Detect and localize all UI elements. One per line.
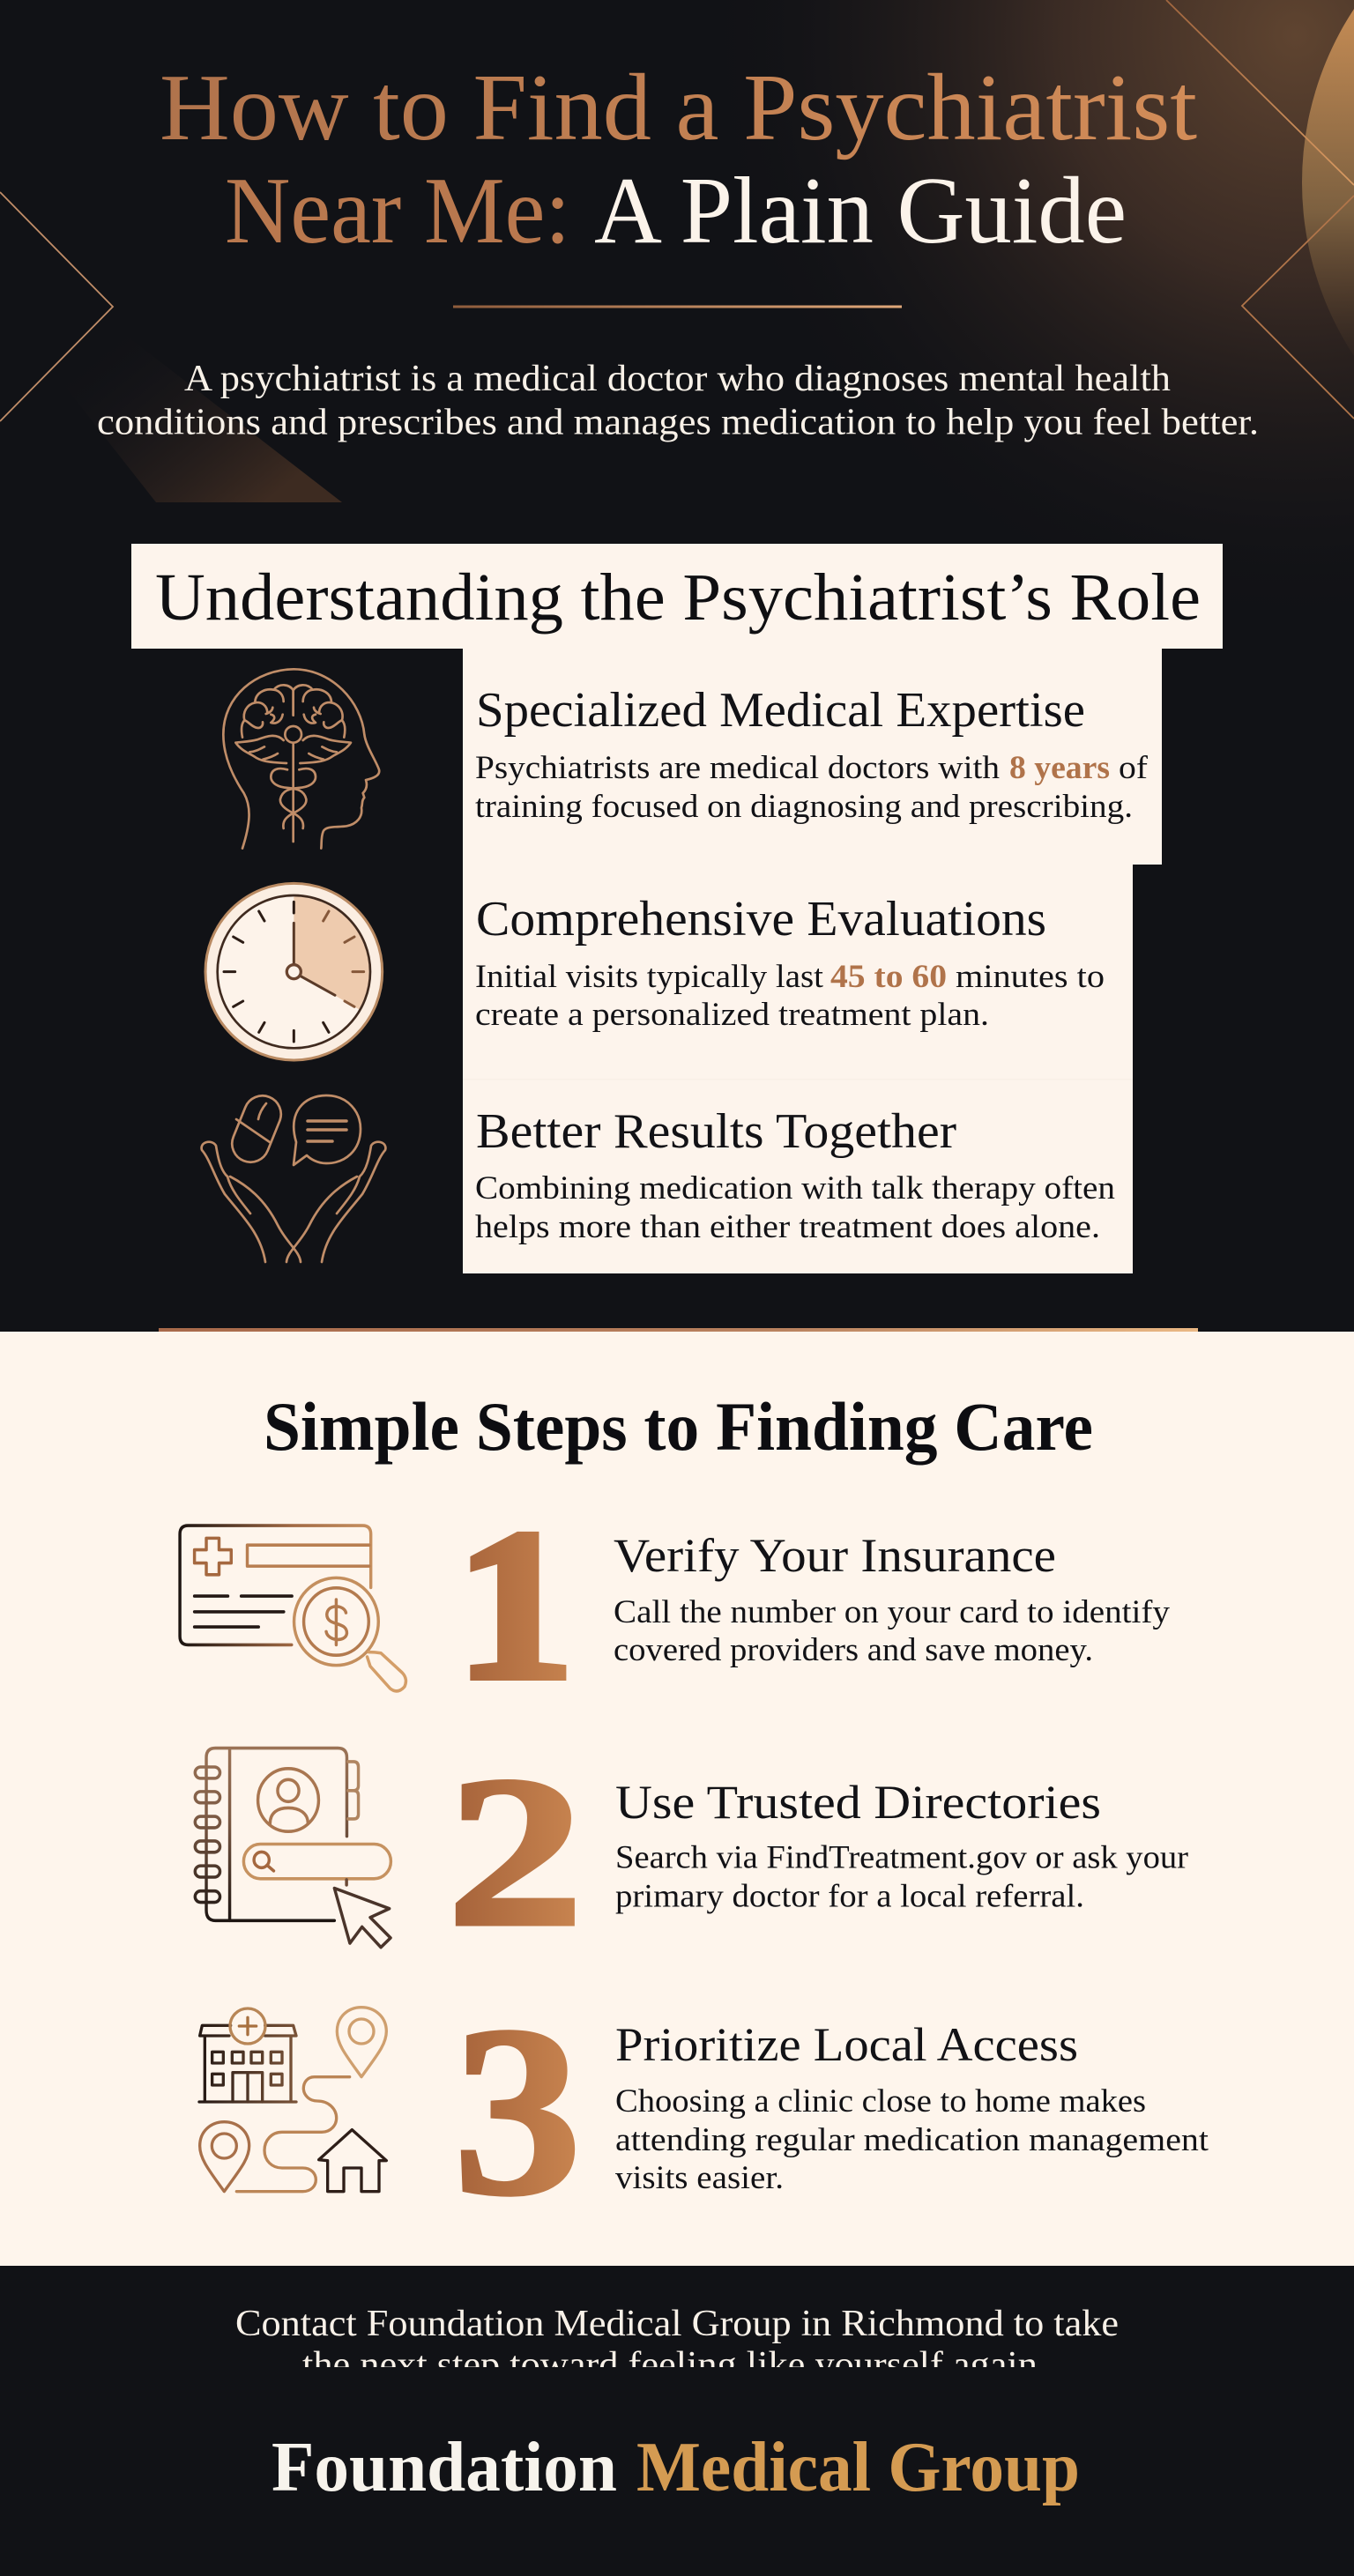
icon: clinic, route and home: [199, 2008, 386, 2192]
icon: insurance card with magnifier: [180, 1526, 405, 1691]
title: A Plain Guide: [594, 159, 1127, 264]
step 3 text: Prioritize Local Access: [615, 2018, 1078, 2071]
item: evaluations: Comprehensive Evaluations: [476, 892, 1046, 947]
item: better results: [475, 1104, 1115, 1245]
title: Near Me:: [225, 159, 570, 264]
step 2 text: [615, 1776, 1188, 1914]
item: better results: helps more than either treatment does alone.: [475, 1209, 1100, 1245]
footer brand: [272, 2429, 1080, 2506]
step 1 text: Verify Your Insurance: [614, 1529, 1056, 1582]
panel background: [131, 544, 1223, 1273]
item: expertise: 8 years: [1009, 750, 1110, 786]
footer call to action: the next step toward feeling like yourself again.: [302, 2345, 1047, 2386]
step 2 text: Use Trusted Directories: [615, 1776, 1101, 1829]
item: evaluations: Initial visits typically last: [475, 959, 824, 995]
item: better results: Better Results Together: [476, 1104, 956, 1159]
numeral 2: 2: [447, 1733, 584, 1971]
footer brand: Medical Group: [636, 2429, 1080, 2506]
step 3 text: Choosing a clinic close to home makes: [615, 2083, 1146, 2119]
panel: understanding the role: [131, 544, 1223, 1273]
title: How to Find a Psychiatrist: [160, 56, 1197, 160]
icon: clock: [205, 883, 383, 1060]
footer brand: Foundation: [272, 2429, 617, 2506]
footer call to action: [236, 2309, 1118, 2367]
item: expertise: training focused on diagnosing and prescribing.: [475, 789, 1133, 825]
step 1 text: covered providers and save money.: [614, 1632, 1093, 1668]
section heading: Understanding the Psychiatrist’s Role: [155, 560, 1201, 635]
intro text: conditions and prescribes and manages medication to help you feel better.: [97, 402, 1259, 442]
icon: head with brain and caduceus: [223, 669, 379, 849]
item: evaluations: create a personalized treatment plan.: [475, 997, 989, 1033]
intro text: [97, 359, 1259, 442]
icon: hands with pill and speech bubble: [202, 1090, 385, 1262]
icon: address book with search: [195, 1748, 391, 1948]
intro text: A psychiatrist is a medical doctor who diagnoses mental health: [184, 359, 1171, 399]
step 3 text: attending regular medication management: [615, 2122, 1209, 2158]
title: [160, 56, 1197, 264]
numeral 1: 1: [455, 1486, 575, 1724]
item: evaluations: [475, 892, 1105, 1033]
header decoration: [0, 0, 1354, 617]
bronze strip: [159, 1328, 1198, 1333]
step 1 text: [614, 1529, 1171, 1668]
item: expertise: Specialized Medical Expertise: [476, 683, 1085, 738]
item: evaluations: minutes to: [956, 959, 1105, 995]
panel: simple steps: [0, 1332, 1354, 2266]
item: expertise: of: [1119, 750, 1149, 786]
step 1 text: Call the number on your card to identify: [614, 1594, 1171, 1630]
steps heading: Simple Steps to Finding Care: [264, 1388, 1093, 1465]
item: evaluations: 45 to 60: [830, 959, 947, 995]
item: better results: Combining medication with talk therapy often: [475, 1170, 1115, 1206]
item: expertise: Psychiatrists are medical doctors with: [475, 750, 1001, 786]
footer call to action: Contact Foundation Medical Group in Richmond to take: [235, 2304, 1119, 2344]
item: expertise: [475, 683, 1149, 825]
step 2 text: primary doctor for a local referral.: [615, 1879, 1084, 1914]
step 2 text: Search via FindTreatment.gov or ask your: [615, 1840, 1188, 1875]
step 3 text: [615, 2018, 1209, 2196]
numeral 3: 3: [453, 1976, 582, 2246]
step 3 text: visits easier.: [615, 2160, 784, 2196]
title divider: [453, 305, 902, 308]
